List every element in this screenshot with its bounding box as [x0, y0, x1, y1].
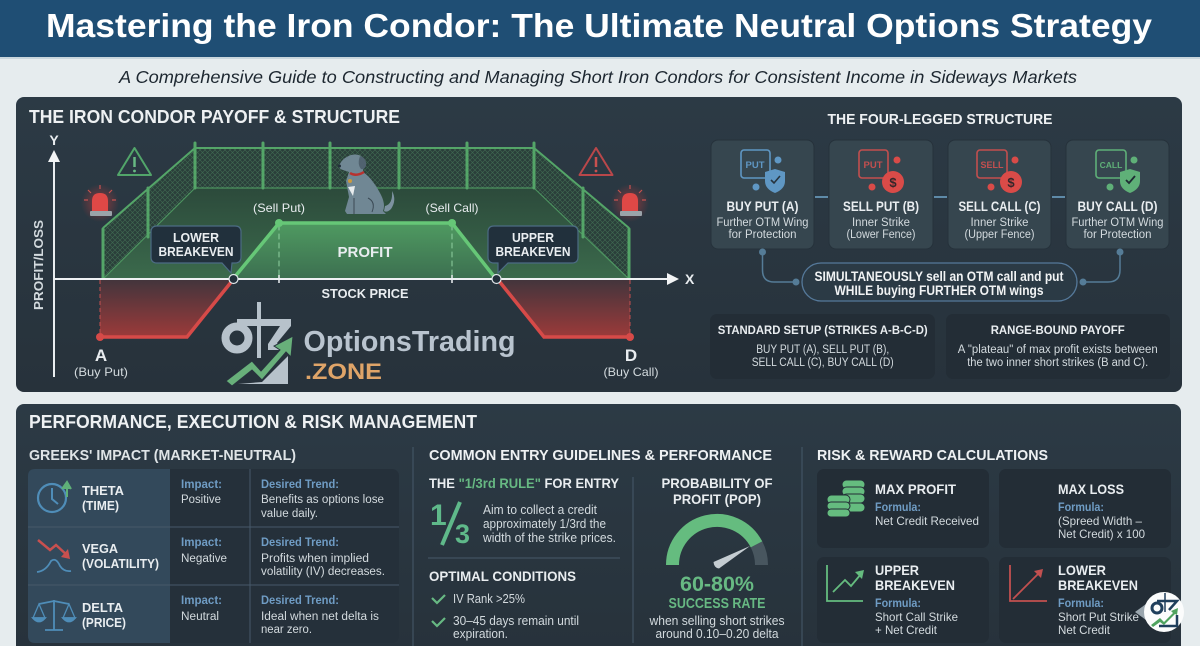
row: delta: Neutral — [181, 611, 219, 623]
payoff chart — [31, 132, 695, 379]
logo wordmark: OptionsTrading — [304, 326, 516, 358]
block: probability of profit: SUCCESS RATE — [668, 595, 766, 612]
card: sell put B: (Lower Fence) — [846, 229, 916, 241]
connectors between cards — [815, 196, 1065, 198]
block: probability of profit: when selling short strikes — [649, 614, 784, 628]
box: standard setup: STANDARD SETUP (STRIKES A-B-C-D) — [718, 323, 928, 337]
row: delta: near zero. — [261, 624, 312, 636]
box: range-bound payoff — [946, 314, 1170, 379]
label: sell put: (Sell Put) — [253, 201, 305, 215]
card: buy put A: BUY PUT (A) — [726, 199, 798, 214]
block: one-third rule: Aim to collect a credit — [483, 503, 598, 517]
heading: entry guidelines: COMMON ENTRY GUIDELINES & PERFORMANCE — [429, 447, 772, 464]
icon: put dollar: PUT — [864, 160, 883, 171]
icon: one third: 1 — [430, 499, 447, 532]
icon: put dollar — [859, 150, 904, 193]
connector: wings to pill — [759, 248, 1124, 286]
card: max profit: Formula: — [875, 500, 921, 514]
box: range-bound payoff: A "plateau" of max profit exists between — [958, 344, 1158, 356]
label: profit: PROFIT — [338, 244, 392, 261]
icon: put shield: PUT — [746, 160, 765, 171]
icon: falling arrow and wave — [37, 540, 71, 572]
point D — [604, 346, 658, 379]
row: vega: Negative — [181, 553, 227, 565]
icon: green warning triangle — [118, 148, 151, 175]
row: delta: (PRICE) — [82, 615, 126, 630]
gauge — [672, 520, 762, 568]
row: delta: Desired Trend: — [261, 595, 339, 607]
card: max loss: MAX LOSS — [1058, 481, 1124, 497]
block: one-third rule: THE "1/3rd RULE" FOR ENTRY — [429, 475, 620, 491]
logo domain: .ZONE — [305, 359, 382, 384]
row: vega — [37, 537, 385, 578]
card: lower breakeven: BREAKEVEN — [1058, 577, 1138, 593]
block: probability of profit — [649, 475, 784, 641]
card: upper breakeven: Short Call Strike — [875, 610, 958, 624]
block: optimal conditions: IV Rank >25% — [453, 592, 525, 606]
block: probability of profit: PROFIT (POP) — [673, 491, 761, 507]
heading: payoff: THE IRON CONDOR PAYOFF & STRUCTURE — [29, 107, 400, 127]
callout pill: simultaneously — [802, 263, 1077, 301]
box: standard setup: SELL CALL (C), BUY CALL (D) — [752, 357, 894, 369]
row: delta: Impact: — [181, 595, 222, 607]
row: theta: THETA — [82, 483, 125, 498]
card: upper breakeven: Formula: — [875, 596, 921, 610]
card: sell put B — [829, 140, 933, 249]
point A: (Buy Put) — [74, 365, 128, 379]
box: standard setup: BUY PUT (A), SELL PUT (B), — [756, 344, 889, 356]
card: buy put A: for Protection — [728, 229, 796, 241]
callout: lower breakeven — [151, 226, 241, 273]
label: sell call: (Sell Call) — [426, 201, 478, 215]
row: theta: Impact: — [181, 479, 222, 491]
icon: call shield: CALL — [1100, 160, 1122, 170]
row: vega: volatility (IV) decreases. — [261, 566, 385, 578]
heading: four-legged structure: THE FOUR-LEGGED STRUCTURE — [828, 111, 1052, 128]
row: theta: (TIME) — [82, 498, 119, 513]
card: max profit: MAX PROFIT — [875, 481, 956, 497]
card: sell call C — [948, 140, 1051, 249]
card: upper breakeven: BREAKEVEN — [875, 577, 955, 593]
table: greeks — [28, 469, 399, 643]
panel: performance, execution and risk — [16, 404, 1181, 646]
card: sell call C: SELL CALL (C) — [958, 199, 1040, 214]
icon: balance scale — [33, 600, 75, 630]
card: lower breakeven: Short Put Strike — [1058, 610, 1139, 624]
icon: dog — [338, 154, 394, 214]
card: buy call D: Further OTM Wing — [1072, 217, 1164, 229]
row: vega: Impact: — [181, 537, 222, 549]
callout pill: simultaneously: WHILE buying FURTHER OTM wings — [834, 283, 1044, 298]
card: sell call C: (Upper Fence) — [964, 229, 1035, 241]
callout: upper breakeven: BREAKEVEN — [496, 244, 570, 259]
row: theta: value daily. — [261, 508, 318, 520]
icon: one third — [430, 499, 470, 549]
box: range-bound payoff: RANGE-BOUND PAYOFF — [991, 323, 1125, 337]
block: probability of profit: PROBABILITY OF — [662, 475, 773, 491]
subtitle: A Comprehensive Guide to Constructing and Managing Short Iron Condors for Consistent Income in Sideways Markets — [118, 67, 1077, 87]
card: lower breakeven: Formula: — [1058, 596, 1104, 610]
block: one-third rule — [429, 475, 620, 549]
fence and floor — [103, 143, 629, 279]
icon: sell dollar: $ — [1007, 175, 1015, 190]
icon: right siren — [611, 184, 649, 222]
card: sell call C: Inner Strike — [970, 217, 1028, 229]
point A: A — [95, 346, 107, 365]
card: max loss: Net Credit) x 100 — [1058, 527, 1145, 541]
row: theta: Benefits as options lose — [261, 494, 384, 506]
card: buy call D — [1066, 140, 1169, 249]
row: theta: Positive — [181, 494, 221, 506]
block: probability of profit: around 0.10–0.20 delta — [656, 627, 779, 641]
icon: sell dollar — [977, 150, 1022, 193]
icon: coins — [827, 480, 865, 517]
logo mark — [226, 302, 293, 386]
loss zones — [100, 280, 630, 337]
callout: lower breakeven: BREAKEVEN — [158, 244, 234, 259]
icon: clock — [38, 482, 71, 512]
block: probability of profit: 60-80% — [680, 573, 754, 596]
profit plateau — [233, 223, 496, 279]
card: sell put B: SELL PUT (B) — [843, 199, 919, 214]
card: sell put B: Inner Strike — [852, 217, 910, 229]
box: range-bound payoff: the two inner short strikes (B and C). — [967, 357, 1148, 369]
card: upper breakeven: + Net Credit — [875, 623, 938, 637]
icon: sell dollar: SELL — [980, 160, 1004, 170]
icon: rising chart — [827, 565, 864, 601]
point A — [74, 346, 128, 379]
box: standard setup — [710, 314, 935, 379]
heading: risk and reward: RISK & REWARD CALCULATIONS — [817, 447, 1048, 464]
icon: check — [432, 618, 445, 626]
card: max loss: Formula: — [1058, 500, 1104, 514]
icon: left siren — [81, 184, 119, 222]
badge: corner logo — [1135, 592, 1184, 632]
block: optimal conditions — [429, 568, 579, 641]
block: one-third rule: approximately 1/3rd the — [483, 517, 606, 531]
heading: performance: PERFORMANCE, EXECUTION & RISK MANAGEMENT — [29, 412, 477, 432]
card: buy call D: BUY CALL (D) — [1078, 199, 1158, 214]
card: upper breakeven — [817, 557, 989, 643]
panel: payoff and structure — [16, 97, 1182, 392]
card: upper breakeven: UPPER — [875, 562, 919, 578]
axes — [48, 150, 679, 377]
icon: red chart — [1010, 565, 1047, 601]
axis label: stock price: STOCK PRICE — [322, 287, 408, 301]
axis label: X: X — [685, 271, 695, 287]
row: vega: VEGA — [82, 541, 119, 556]
axis label: profit loss: PROFIT/LOSS — [31, 220, 46, 310]
block: optimal conditions: OPTIMAL CONDITIONS — [429, 568, 576, 584]
block: one-third rule: width of the strike prices. — [482, 531, 616, 545]
icon: check — [432, 595, 445, 603]
card: max profit: Net Credit Received — [875, 514, 979, 528]
row: delta: Ideal when net delta is — [261, 611, 379, 623]
icon: put dollar: $ — [889, 175, 897, 190]
point D: D — [625, 346, 637, 365]
title: Mastering the Iron Condor: The Ultimate Neutral Options Strategy — [46, 7, 1153, 44]
row: vega: Profits when implied — [261, 553, 369, 565]
row: theta: Desired Trend: — [261, 479, 339, 491]
icon: one third: 3 — [455, 519, 470, 549]
row: vega: (VOLATILITY) — [82, 556, 159, 571]
block: optimal conditions: expiration. — [453, 627, 508, 641]
payoff line — [96, 219, 634, 341]
heading: greeks: GREEKS' IMPACT (MARKET-NEUTRAL) — [29, 447, 296, 464]
row: theta — [38, 479, 384, 520]
card: buy call D: for Protection — [1084, 229, 1152, 241]
axis label: Y: Y — [49, 132, 59, 148]
card: max profit — [817, 469, 989, 548]
card: max loss — [999, 469, 1171, 548]
callout pill: simultaneously: SIMULTANEOUSLY sell an OTM call and put — [814, 269, 1064, 284]
logo: OptionsTrading.Zone — [226, 302, 516, 386]
icon: red warning triangle — [580, 148, 612, 175]
card: buy put A: Further OTM Wing — [716, 217, 808, 229]
header banner — [0, 0, 1200, 59]
card: lower breakeven: LOWER — [1058, 562, 1106, 578]
point D: (Buy Call) — [604, 365, 658, 379]
card: max loss: (Spreed Width – — [1058, 514, 1142, 528]
card: buy put A — [711, 140, 814, 249]
card: lower breakeven: Net Credit — [1058, 623, 1111, 637]
row: vega: Desired Trend: — [261, 537, 339, 549]
card: lower breakeven — [999, 557, 1171, 643]
block: optimal conditions: 30–45 days remain until — [453, 614, 579, 628]
row: delta: DELTA — [82, 600, 124, 615]
callout: upper breakeven — [488, 226, 578, 273]
callout: lower breakeven: LOWER — [173, 230, 220, 245]
row: delta — [33, 595, 379, 636]
callout: upper breakeven: UPPER — [512, 230, 555, 245]
